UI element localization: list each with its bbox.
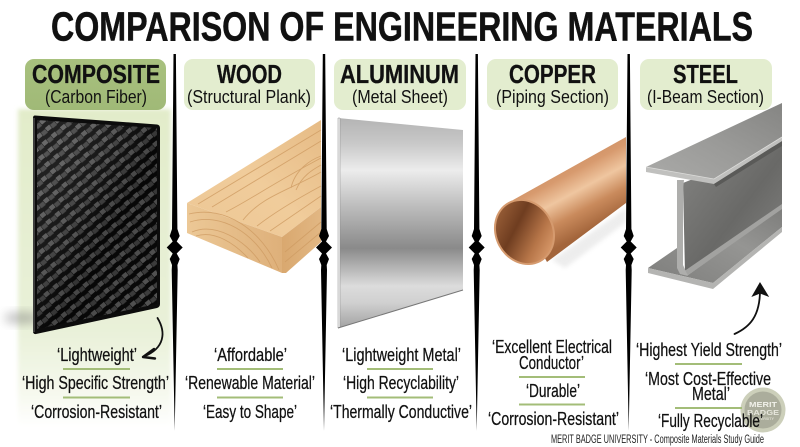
properties: composite: ‘Lightweight’	[57, 344, 137, 365]
badge: merit badge university: UNIVERSITY	[752, 416, 774, 421]
properties: copper: ‘Excellent Electrical	[492, 336, 612, 357]
properties: wood	[185, 344, 315, 422]
heading: composite	[25, 59, 166, 110]
heading: copper: (Piping Section)	[496, 87, 609, 108]
properties: wood: ‘Affordable’	[214, 344, 287, 365]
heading: aluminum: ALUMINUM	[340, 61, 459, 89]
panel: wood	[184, 59, 321, 422]
heading: composite: (Carbon Fiber)	[45, 87, 147, 108]
properties: steel: ‘Fully Recyclable’	[658, 410, 763, 431]
divider 4	[621, 54, 637, 431]
heading: wood: WOOD	[217, 61, 282, 89]
properties: wood: ‘Easy to Shape’	[203, 401, 297, 422]
heading: copper	[487, 59, 618, 110]
properties: steel	[636, 339, 782, 431]
panel: composite	[4, 59, 171, 427]
badge: merit badge university: MERIT	[749, 400, 777, 409]
properties: copper: ‘Durable’	[526, 380, 580, 401]
heading: wood: (Structural Plank)	[187, 87, 311, 108]
properties: aluminum: ‘Thermally Conductive’	[330, 401, 472, 422]
panel: copper	[482, 59, 626, 429]
image: copper pipe	[482, 137, 626, 276]
heading: steel: (I-Beam Section)	[647, 87, 764, 108]
heading: aluminum	[334, 59, 466, 110]
arrow: to steel beam	[734, 283, 768, 334]
badge: merit badge university	[740, 388, 786, 432]
divider 1	[167, 54, 183, 431]
properties: copper: ‘Corrosion-Resistant’	[488, 408, 619, 429]
arrow: to lightweight	[143, 318, 163, 358]
heading: steel	[640, 59, 772, 110]
heading: copper: COPPER	[509, 61, 596, 89]
heading: wood	[184, 59, 315, 110]
image: aluminum sheet	[338, 118, 463, 328]
image: wood plank	[187, 120, 321, 273]
divider 2	[316, 54, 332, 431]
properties: steel: Metal’	[692, 383, 730, 404]
properties: copper: Conductor’	[519, 352, 584, 373]
properties: wood: ‘Renewable Material’	[185, 372, 315, 393]
highlight glow	[18, 109, 171, 427]
image: steel i-beam	[646, 103, 782, 289]
properties: composite	[22, 344, 169, 422]
properties: aluminum: ‘High Recyclability’	[343, 372, 459, 393]
properties: composite: ‘Corrosion-Resistant’	[31, 401, 162, 422]
panel: aluminum	[330, 59, 472, 422]
properties: copper	[488, 336, 619, 429]
heading: composite: COMPOSITE	[32, 61, 160, 89]
properties: composite: ‘High Specific Strength’	[22, 372, 169, 393]
divider 3	[469, 54, 485, 431]
image: carbon fiber sheet	[4, 116, 160, 334]
properties: aluminum	[330, 344, 472, 422]
heading: aluminum: (Metal Sheet)	[352, 87, 448, 108]
heading: steel: STEEL	[673, 61, 738, 89]
panel: steel	[636, 59, 786, 432]
properties: aluminum: ‘Lightweight Metal’	[342, 344, 461, 365]
badge: merit badge university: BADGE	[747, 408, 779, 417]
